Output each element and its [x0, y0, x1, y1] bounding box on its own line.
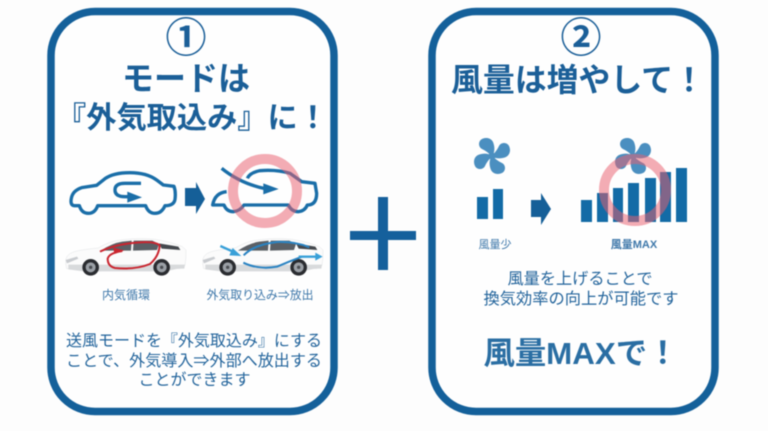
chart: low airflow bars [477, 189, 503, 219]
text block: mode explanation: ことで、外気導入⇒外部へ放出する [66, 351, 322, 370]
label: low airflow: 風量少 [478, 237, 512, 251]
icon: fan small [474, 138, 510, 174]
photo: car with red recirculation path [66, 239, 186, 276]
panel: left card outline [51, 12, 334, 412]
highlight ring: right [604, 159, 666, 221]
arrow: low to max [531, 193, 551, 225]
label: recirculation: 内気循環 [102, 287, 150, 302]
text block: mode explanation [66, 332, 322, 389]
icon: plus [350, 197, 416, 270]
text block: airflow explanation [484, 270, 678, 308]
panel: left content [56, 15, 328, 389]
panel: right card outline [432, 12, 715, 412]
callout: airflow max: 風量MAXで！ [484, 336, 678, 371]
step number 1: ① [166, 15, 206, 61]
heading: increase airflow: 風量は増やして！ [451, 62, 705, 98]
text block: airflow explanation: 風量を上げることで [508, 270, 652, 288]
panel: right content [451, 15, 705, 371]
icon: recirculation car [71, 173, 175, 213]
heading: mode: モードは [122, 60, 250, 97]
highlight ring: left [233, 159, 297, 223]
label: max airflow: 風量MAX [611, 238, 658, 251]
chart: max airflow bars [581, 168, 687, 222]
text block: mode explanation: 送風モードを『外気取込み』にする [66, 332, 322, 350]
step number 2: ② [560, 15, 602, 61]
label: outside intake and release: 外気取り込み⇒放出 [206, 287, 314, 302]
arrow: recirculation to intake [185, 182, 205, 214]
icon: intake car with highlight [213, 168, 317, 212]
text block: mode explanation: ことができます [138, 371, 251, 389]
text block: airflow explanation: 換気効率の向上が可能です [484, 290, 678, 308]
heading: outside air intake: 『外気取込み』に！ [56, 102, 328, 135]
photo: car with blue intake path [203, 239, 323, 276]
icon: fan max [615, 138, 651, 174]
